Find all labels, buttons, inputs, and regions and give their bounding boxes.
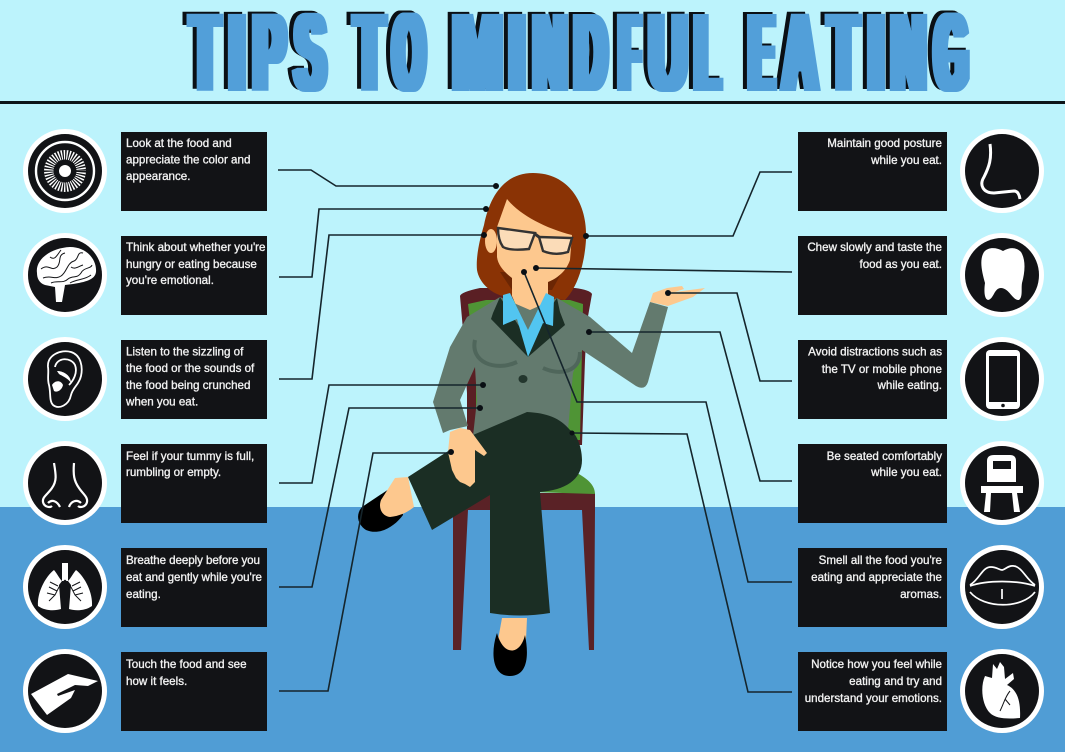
lapels <box>491 297 565 357</box>
panel: listen: the food or the sounds of <box>126 362 255 375</box>
icon: heart <box>960 649 1044 733</box>
connector lines right <box>524 172 792 692</box>
icon: brain <box>23 233 107 317</box>
panel: smell: Smell all the food you're <box>819 554 942 567</box>
panel: touch: how it feels. <box>126 675 187 688</box>
hair <box>477 173 586 300</box>
panel: distractions: while eating. <box>877 379 942 392</box>
icon: chair <box>960 441 1044 525</box>
panel: look: appreciate the color and <box>126 154 250 166</box>
panel: notice: Notice how you feel while <box>811 658 942 671</box>
panel: think: Think about whether you're <box>126 241 266 254</box>
icon: phone <box>960 337 1044 421</box>
icon: hand <box>23 649 107 733</box>
panel: listen: when you eat. <box>125 396 198 408</box>
raised arm and jacket <box>650 286 705 306</box>
panel: think <box>121 236 267 315</box>
panel: smell: eating and appreciate the <box>811 571 942 584</box>
panel: breathe: Breathe deeply before you <box>126 554 260 567</box>
panel: listen: Listen to the sizzling of <box>126 346 244 358</box>
panel: seated: Be seated comfortably <box>827 450 942 463</box>
icon: lips <box>960 545 1044 629</box>
panel: distractions: Avoid distractions such as <box>808 346 942 358</box>
title <box>191 0 967 114</box>
connector lines left <box>278 170 496 691</box>
background wall <box>0 0 1065 508</box>
panel: chew: food as you eat. <box>859 258 942 271</box>
panel: notice: understand your emotions. <box>805 692 942 705</box>
panel: distractions: the TV or mobile phone <box>822 363 942 376</box>
face and neck <box>485 199 572 332</box>
panel: seated <box>798 444 947 523</box>
panel: feel: rumbling or empty. <box>126 466 221 479</box>
panel: think: you're emotional. <box>126 274 214 287</box>
panel: seated: while you eat. <box>870 466 942 479</box>
icon: posture curve <box>960 129 1044 213</box>
jacket button <box>518 375 528 383</box>
background floor <box>0 507 1065 752</box>
panel: breathe <box>121 548 267 627</box>
icon: tooth <box>960 233 1044 317</box>
panel: posture: while you eat. <box>870 154 942 167</box>
panel: chew <box>798 236 947 315</box>
panel: chew: Chew slowly and taste the <box>807 241 942 254</box>
panel: listen <box>121 340 267 419</box>
panel: smell <box>798 548 947 627</box>
chair <box>453 288 595 650</box>
woman on chair illustration <box>358 173 705 676</box>
panel: look: appearance. <box>126 170 190 183</box>
panel: notice <box>798 652 947 731</box>
panel: notice: eating and try and <box>849 675 942 688</box>
hand on knee <box>448 428 487 487</box>
icon: lungs <box>23 545 107 629</box>
jacket shading <box>474 340 580 372</box>
connector dots <box>448 183 671 455</box>
panel: feel: Feel if your tummy is full, <box>126 450 254 463</box>
glasses <box>498 228 572 254</box>
panel: breathe: eating. <box>126 588 161 601</box>
icon: nose <box>23 441 107 525</box>
shirt collar <box>503 293 554 357</box>
panel: touch: Touch the food and see <box>126 658 247 671</box>
left foot <box>358 477 414 532</box>
right foot <box>493 618 527 676</box>
icon: ear <box>23 337 107 421</box>
panel: posture <box>798 132 947 211</box>
panel: breathe: eat and gently while you're <box>126 571 262 584</box>
panel: look <box>121 132 267 211</box>
panel: listen: the food being crunched <box>126 379 250 392</box>
panel: feel <box>121 444 267 523</box>
panel: touch <box>121 652 267 731</box>
panel: posture: Maintain good posture <box>827 137 942 150</box>
panel: look: Look at the food and <box>126 137 232 150</box>
panel: smell: aromas. <box>900 588 942 601</box>
pants <box>408 412 582 616</box>
icon: eye <box>23 129 107 213</box>
panel: think: hungry or eating because <box>126 258 257 271</box>
panel: distractions <box>798 340 947 419</box>
